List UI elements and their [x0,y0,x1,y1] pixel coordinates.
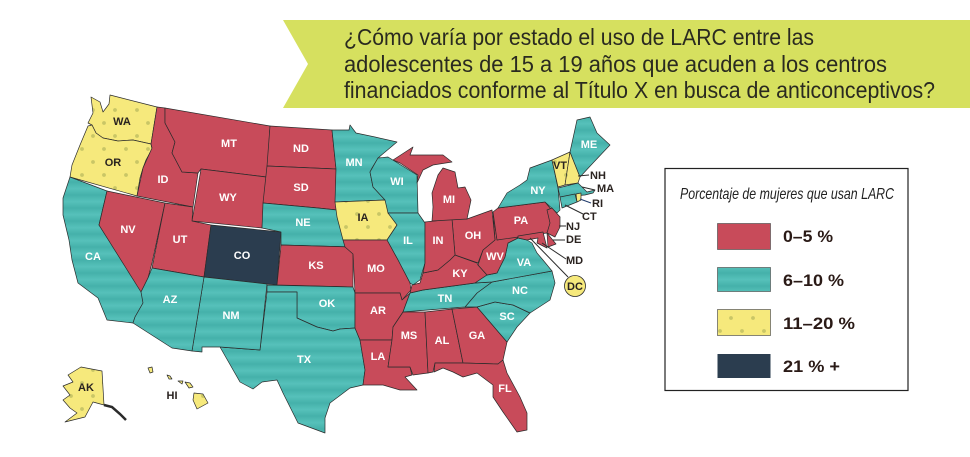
state: MO: MO [367,263,385,275]
state: NC: NC [512,285,528,297]
state: DE [547,233,556,247]
state: OK [267,285,355,331]
state: HI [148,367,208,409]
legend item: 11–20 % [718,310,855,336]
legend item: 6–10 %: 6–10 % [783,271,844,290]
state: TX [220,292,365,433]
state: CO [204,225,281,285]
state: WA: WA [113,116,131,128]
state: MI: MI [443,194,455,206]
state: TN [403,282,492,312]
state: MO [343,240,411,300]
callout: MD: MD [566,255,583,267]
state: SC [477,302,530,342]
state: ND: ND [293,143,309,155]
state: NY: NY [530,185,546,197]
state: CA [63,177,143,323]
state: OH [452,210,495,263]
state: KS: KS [308,260,324,272]
state: MN [332,125,397,202]
state: WI [370,157,418,213]
state: AZ [133,268,204,351]
state: MD [518,232,547,248]
state: FL: FL [498,383,512,395]
state: UT [152,203,211,277]
callout: DC: DC [567,281,583,293]
callout: NJ [559,221,580,233]
state: NE: NE [295,217,311,229]
state: HI: HI [166,390,178,402]
state: WA [88,95,157,144]
state: AR: AR [370,305,386,317]
state: ME [570,117,610,177]
title banner [283,20,970,108]
state: GA: GA [469,330,485,342]
state: GA [452,307,507,364]
state: KY: KY [452,268,468,280]
state: MN: MN [345,157,363,169]
state: LA: LA [371,351,385,363]
callout: CT [565,205,597,223]
state: NV: NV [120,224,136,236]
state: AZ: AZ [163,294,178,306]
state: KS [277,245,353,287]
state: CO: CO [234,250,251,262]
state: OR [70,125,152,196]
state: NM: NM [222,310,240,322]
state: SC: SC [499,311,515,323]
callout: NH [578,170,606,182]
state: MI [393,147,471,221]
title banner: adolescentes de 15 a 19 años que acuden a los centros [344,51,887,77]
state: KY [410,255,487,293]
state: OK: OK [319,298,335,310]
state: TN: TN [438,293,452,305]
map of the United States [63,95,614,433]
state: AL: AL [435,335,450,347]
state: NC [465,271,555,313]
state: IL [387,213,425,285]
callout: NJ: NJ [566,221,580,233]
state: VT [552,152,570,187]
state: ID [137,107,198,207]
state: WI: WI [390,176,404,188]
state: MT: MT [221,138,237,150]
state: SD [263,166,337,210]
state: IL: IL [403,235,413,247]
state: AK [63,367,126,422]
legend panel [665,168,908,390]
state: IA: IA [358,212,369,224]
state: WY: WY [219,192,238,204]
title banner: financiados conforme al Título X en busca de anticonceptivos? [344,77,935,103]
state: UT: UT [173,234,188,246]
callout: MA [582,183,614,195]
legend title: Porcentaje de mujeres que usan LARC [680,186,894,203]
state: WY [192,169,266,228]
state: MA [558,183,595,197]
callout: RI [580,198,603,210]
state: ND [267,126,336,169]
state: MS [388,312,428,375]
state: OR: OR [105,157,121,169]
state: CT [560,194,577,208]
state: AL [425,309,463,373]
state: FL [434,360,527,432]
callout: DC [530,238,586,296]
callout: CT: CT [582,211,597,223]
state: AK: AK [78,382,94,394]
legend item: 0–5 %: 0–5 % [783,227,833,246]
state: VT: VT [553,160,567,172]
state: CA: CA [85,251,101,263]
callout: NH: NH [590,170,606,182]
state: AR [355,293,410,340]
callout: DE [553,234,581,246]
state: IA [335,200,397,240]
state: SD: SD [293,182,309,194]
state: TX: TX [297,354,312,366]
state: NY [498,160,560,213]
legend item: 0–5 % [718,224,833,250]
callout: MA: MA [597,183,614,195]
callout: DE: DE [566,234,581,246]
state: WV [478,212,518,275]
state: IN [423,219,455,273]
state: WV: WV [486,251,505,263]
state: NM [192,277,267,352]
state: RI [576,193,581,202]
state: VA: VA [517,257,531,269]
legend item: 21 % +: 21 % + [783,357,840,376]
state: OH: OH [465,230,481,242]
state: ID: ID [158,174,169,186]
state: LA [360,340,417,390]
state: NV [99,191,165,292]
state: NJ [547,208,560,237]
legend item: 21 % + [718,354,840,378]
state: MT [165,108,270,177]
state: PA: PA [514,215,528,227]
state: NE [262,203,352,247]
title banner: ¿Cómo varía por estado el uso de LARC entre las [344,24,814,50]
state: MS: MS [401,330,417,342]
legend item: 6–10 % [718,268,844,292]
legend item: 11–20 %: 11–20 % [783,314,855,333]
state: IN: IN [432,235,444,247]
state: VA [475,238,552,283]
callout: MD [542,243,583,267]
state: NH [565,152,580,185]
state: ME: ME [581,139,597,151]
callout: RI: RI [592,198,603,210]
state: PA [493,202,560,240]
